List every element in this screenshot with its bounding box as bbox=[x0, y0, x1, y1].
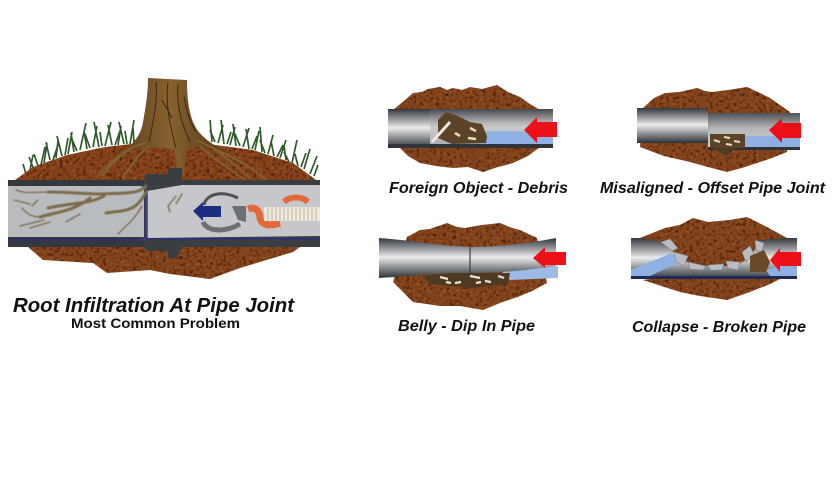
panel: root infiltration at pipe joint bbox=[8, 78, 320, 331]
panel: foreign object debris bbox=[388, 85, 568, 197]
arrow bbox=[524, 117, 557, 143]
pipe bbox=[388, 109, 553, 148]
arrow bbox=[533, 247, 566, 268]
arrow bbox=[769, 118, 801, 143]
debris bbox=[423, 273, 510, 288]
joint line bbox=[469, 247, 471, 273]
debris bbox=[432, 112, 487, 144]
roots inside pipe bbox=[14, 186, 182, 234]
caption: Misaligned - Offset Pipe Joint bbox=[600, 180, 826, 197]
soil bbox=[393, 223, 547, 310]
soil bbox=[640, 217, 787, 300]
soil bbox=[393, 85, 540, 172]
soil above and below the pipe bbox=[15, 143, 316, 279]
panel: collapse broken pipe bbox=[631, 217, 806, 336]
panel: belly dip in pipe bbox=[379, 223, 566, 335]
pipe bbox=[8, 168, 320, 258]
caption: Belly - Dip In Pipe bbox=[398, 318, 535, 335]
broken pipe fragments bbox=[661, 239, 764, 270]
right pipe section bbox=[708, 113, 800, 150]
arrow bbox=[770, 248, 801, 272]
pipe bbox=[631, 238, 797, 279]
cutter tool and blue arrow bbox=[193, 194, 320, 230]
panel: misaligned offset pipe joint bbox=[600, 87, 826, 197]
rubble bbox=[750, 250, 770, 272]
subheading: Most Common Problem bbox=[71, 316, 240, 331]
joint debris bbox=[710, 134, 745, 156]
caption: Foreign Object - Debris bbox=[389, 180, 568, 197]
tree trunk and roots bbox=[96, 78, 266, 180]
left pipe section bbox=[637, 108, 708, 143]
water bbox=[500, 266, 558, 280]
caption: Collapse - Broken Pipe bbox=[632, 319, 806, 336]
soil bbox=[640, 87, 790, 172]
grass bbox=[23, 120, 318, 176]
heading: Root Infiltration At Pipe Joint bbox=[13, 294, 295, 317]
curved pipe bbox=[379, 238, 556, 278]
